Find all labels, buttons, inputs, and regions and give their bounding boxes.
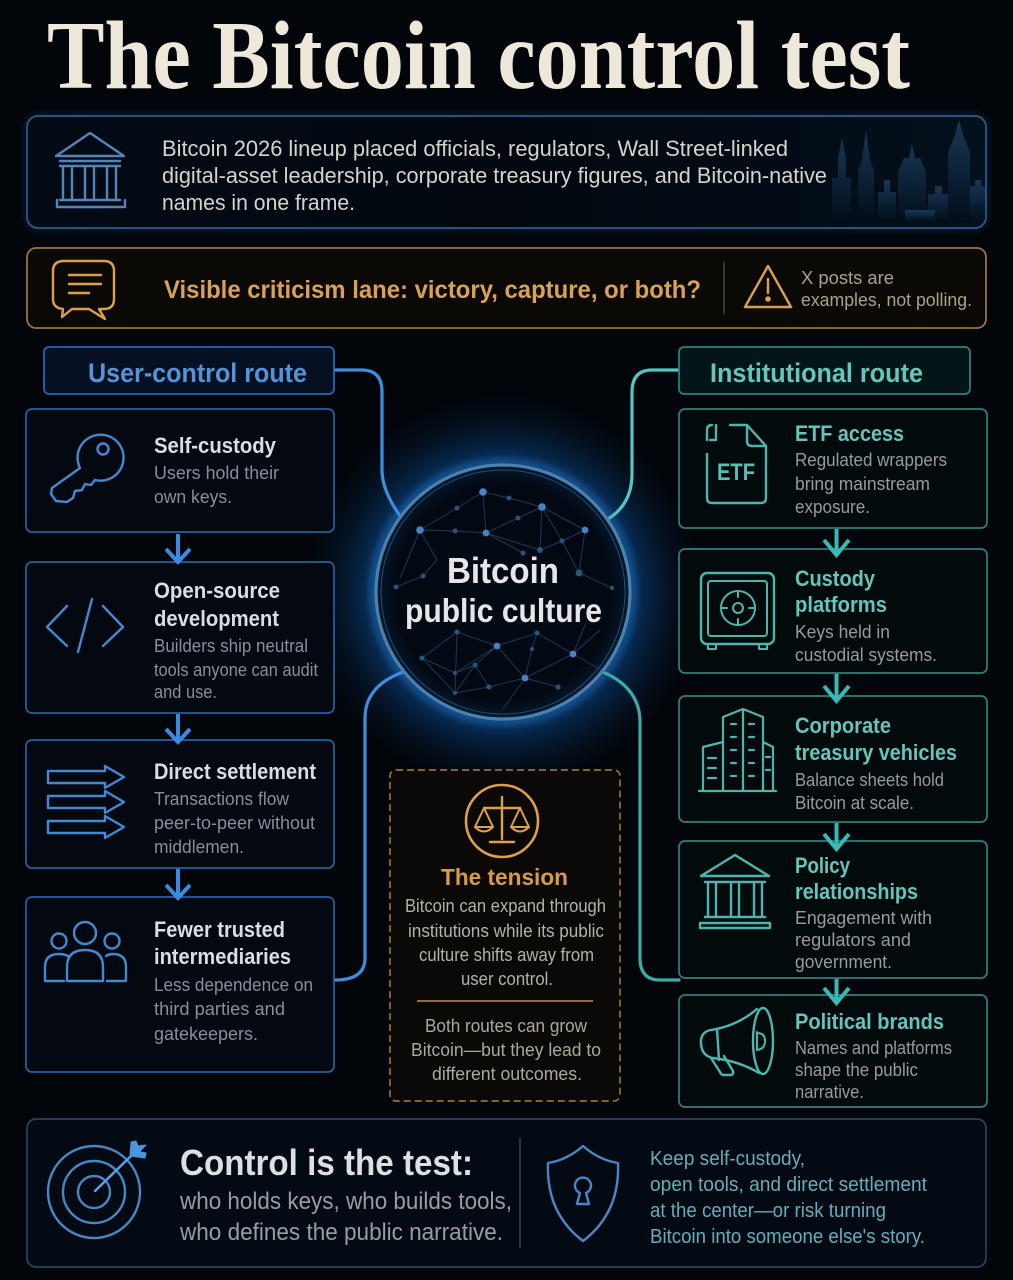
card text: Balance sheets hold <box>795 770 944 790</box>
tension body: Bitcoin can expand through <box>405 896 606 916</box>
card text <box>154 433 279 507</box>
card: custody platforms <box>701 566 937 665</box>
tension conclusion: Both routes can grow <box>425 1016 588 1036</box>
closing message: open tools, and direct settlement <box>650 1174 927 1196</box>
panel: user-control cards <box>26 409 334 1072</box>
card text: platforms <box>795 592 887 617</box>
card text: Self-custody <box>154 433 277 458</box>
central hub <box>373 462 633 722</box>
heading: user-control route: User-control route <box>88 358 307 388</box>
icon: speech bubble <box>53 261 114 319</box>
card text: middlemen. <box>154 837 244 857</box>
card text: Open-source <box>154 578 280 603</box>
card text: tools anyone can audit <box>154 660 318 680</box>
closing message: Keep self-custody, <box>650 1148 805 1170</box>
card text: Corporate <box>795 713 891 738</box>
icon: warning triangle <box>745 266 791 307</box>
card text: Policy <box>795 853 851 878</box>
closing message: at the center—or risk turning <box>650 1200 886 1222</box>
card text: custodial systems. <box>795 645 937 665</box>
polling note: X posts are <box>801 268 894 288</box>
tension heading: The tension <box>441 864 568 890</box>
tension body: user control. <box>461 969 553 989</box>
heading: user-control route <box>44 347 334 394</box>
card text <box>154 917 313 1044</box>
polling note <box>801 268 972 310</box>
hub label <box>405 550 602 629</box>
card text: Builders ship neutral <box>154 636 308 656</box>
arrows: right flow <box>824 529 849 1003</box>
card text: ETF access <box>795 421 904 446</box>
icon: people <box>45 922 126 981</box>
heading: institutional route: Institutional route <box>710 358 923 388</box>
icon: key <box>51 435 124 502</box>
card text: Transactions flow <box>154 789 290 809</box>
card text: exposure. <box>795 497 870 517</box>
card text: Less dependence on <box>154 975 313 995</box>
card text: narrative. <box>795 1082 864 1102</box>
card: policy relationships <box>700 853 932 972</box>
control subtext: who defines the public narrative. <box>179 1219 503 1246</box>
control subtext <box>179 1188 512 1246</box>
card text: development <box>154 606 280 631</box>
card text <box>795 713 957 813</box>
closing message <box>650 1148 927 1248</box>
card: fewer trusted intermediaries <box>45 917 313 1044</box>
lineup text: names in one frame. <box>162 190 355 215</box>
connector lines <box>334 370 679 980</box>
heading: institutional route <box>679 347 970 394</box>
card: self-custody <box>51 433 279 507</box>
icon: ETF document <box>707 425 766 503</box>
card text: Political brands <box>795 1009 944 1034</box>
card text <box>154 578 318 702</box>
icon: government building <box>700 855 770 928</box>
criticism heading: Visible criticism lane: victory, capture, or both? <box>164 276 701 304</box>
card text: peer-to-peer without <box>154 813 315 833</box>
tension conclusion <box>411 1016 601 1084</box>
control subtext: who holds keys, who builds tools, <box>179 1188 512 1215</box>
card text <box>154 759 317 857</box>
panel: the tension <box>390 770 620 1101</box>
icon: megaphone <box>701 1008 773 1075</box>
arrows: left flow <box>166 534 190 898</box>
card text: Direct settlement <box>154 759 317 784</box>
icon: scales in circle <box>466 785 538 857</box>
card text: Names and platforms <box>795 1038 952 1058</box>
tension body: culture shifts away from <box>419 945 594 965</box>
tension conclusion: different outcomes. <box>432 1064 582 1084</box>
tension conclusion: Bitcoin—but they lead to <box>411 1040 601 1060</box>
card text: shape the public <box>795 1060 918 1080</box>
card text: treasury vehicles <box>795 740 957 765</box>
icon: safe <box>701 573 774 649</box>
card text: third parties and <box>154 999 285 1019</box>
icon: bank building <box>56 133 125 207</box>
card text <box>795 566 937 665</box>
card text: Custody <box>795 566 876 591</box>
card text: own keys. <box>154 487 232 507</box>
icon: target with arrow <box>48 1141 146 1238</box>
lineup text: Bitcoin 2026 lineup placed officials, regulators, Wall Street-linked <box>162 136 788 161</box>
tension body <box>405 896 606 989</box>
title: The Bitcoin control test <box>47 2 910 110</box>
card text: relationships <box>795 879 918 904</box>
lineup text: digital-asset leadership, corporate treasury figures, and Bitcoin-native <box>162 163 827 188</box>
tension body: institutions while its public <box>408 921 604 941</box>
hub label: public culture <box>405 592 602 629</box>
card text: Bitcoin at scale. <box>795 793 914 813</box>
closing message: Bitcoin into someone else's story. <box>650 1226 925 1248</box>
card: corporate treasury vehicles <box>699 709 957 813</box>
card text <box>795 1009 952 1102</box>
card text: gatekeepers. <box>154 1024 258 1044</box>
icon: shield with keyhole <box>548 1146 618 1241</box>
panel: lineup summary <box>27 116 986 228</box>
panel: control is the test <box>27 1119 986 1267</box>
control heading: Control is the test: <box>180 1142 473 1183</box>
card text: intermediaries <box>154 944 291 969</box>
card text: bring mainstream <box>795 474 930 494</box>
skyline illustration <box>832 120 985 222</box>
card text: Regulated wrappers <box>795 450 947 470</box>
panel: institutional cards <box>679 409 987 1107</box>
card text: Users hold their <box>154 463 279 483</box>
hub label: Bitcoin <box>447 550 559 591</box>
card: political brands <box>701 1008 952 1102</box>
card text: Engagement with <box>795 908 932 928</box>
network graph <box>394 488 614 709</box>
icon: three arrows <box>48 766 124 838</box>
icon: code brackets <box>47 599 123 652</box>
card text: Keys held in <box>795 622 890 642</box>
card text <box>795 853 932 972</box>
icon: ETF document: ETF <box>717 459 755 486</box>
card text: regulators and <box>795 930 911 950</box>
card text: and use. <box>154 682 217 702</box>
card: ETF access <box>707 421 947 517</box>
card: direct settlement <box>48 759 317 857</box>
icon: office buildings <box>699 709 776 791</box>
card text: government. <box>795 952 892 972</box>
card text: Fewer trusted <box>154 917 285 942</box>
polling note: examples, not polling. <box>801 290 972 310</box>
panel: criticism lane <box>27 248 986 328</box>
card text <box>795 421 947 517</box>
card: open-source development <box>47 578 318 702</box>
lineup text <box>162 136 827 215</box>
